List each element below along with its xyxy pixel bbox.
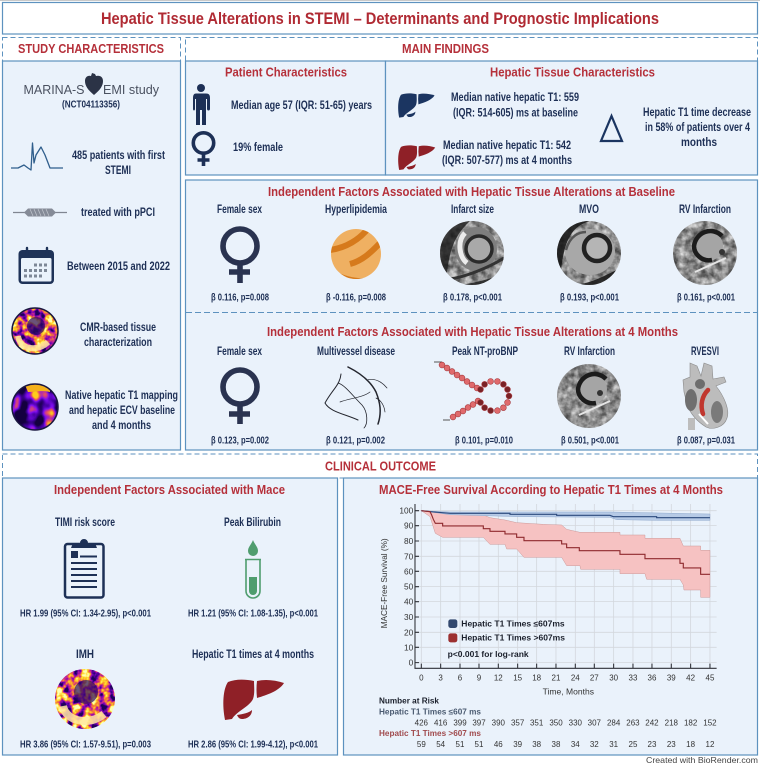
number at risk table: 399	[453, 718, 467, 727]
legend	[448, 619, 566, 659]
factor: MVO: β 0.193, p<0.001	[560, 292, 619, 304]
x axis labels	[419, 673, 715, 682]
number at risk table: 284	[607, 718, 621, 727]
number at risk table: 263	[626, 718, 640, 727]
x axis labels: 42	[686, 673, 696, 682]
number at risk table: 46	[494, 740, 503, 749]
factor: female sex 4 months: β 0.123, p=0.002	[211, 436, 269, 446]
heading: survival: MACE-Free Survival According to Hepatic T1 Times at 4 Months	[379, 483, 723, 497]
number at risk table: 330	[569, 718, 583, 727]
x axis labels: 39	[667, 673, 676, 682]
factor: infarct size	[440, 204, 504, 304]
factor: RVESVI: RVESVI	[691, 346, 719, 358]
y axis labels: 100	[399, 506, 414, 516]
study logo: MARINA-S	[24, 83, 84, 97]
icon: stent	[13, 208, 67, 216]
Kaplan-Meier chart	[379, 504, 717, 749]
axes	[415, 504, 717, 668]
factor: RV infarction 4 months: β 0.501, p<0.001	[561, 436, 619, 446]
title	[2, 2, 758, 34]
text: baseline T1: Median native hepatic T1: 559	[451, 92, 579, 104]
factor: RV infarction 4 months: RV Infarction	[564, 346, 615, 358]
factor: IMH: HR 3.86 (95% CI: 1.57-9.51), p=0.003	[20, 740, 151, 750]
factor: female sex baseline	[211, 204, 269, 304]
factor: hepatic T1 times: Hepatic T1 times at 4 months	[192, 649, 314, 661]
legend: Hepatic T1 Times ≤607ms	[461, 619, 565, 628]
y axis labels: 30	[404, 612, 414, 622]
number at risk table: 152	[703, 718, 717, 727]
y axis labels: 50	[404, 582, 414, 592]
heading: 4 month factors: Independent Factors Associated with Hepatic Tissue Alterations at 4 Months	[267, 325, 678, 339]
y axis labels: 40	[404, 597, 414, 607]
text: 4 month T1: (IQR: 507-577) ms at 4 months	[442, 155, 572, 167]
study logo: (NCT04113356)	[62, 100, 120, 110]
number at risk table: 390	[492, 718, 506, 727]
factor: hyperlipidemia	[325, 204, 387, 304]
legend: Hepatic T1 Times >607ms	[461, 633, 566, 642]
factor: RV infarction baseline	[673, 204, 737, 304]
x axis labels: 24	[571, 673, 580, 682]
icon: CMR map	[12, 308, 58, 354]
text: hepatic T1 mapping	[65, 390, 178, 432]
heading: MACE factors: Independent Factors Associated with Mace	[54, 483, 285, 497]
factor: multivessel disease: Multivessel disease	[317, 346, 395, 358]
panel: patient characteristics: Patient Characteristics	[225, 66, 347, 80]
number at risk table: 38	[532, 740, 542, 749]
red survival line	[421, 511, 710, 574]
factor: hyperlipidemia: Hyperlipidemia	[325, 204, 387, 216]
text: dates: Between 2015 and 2022	[67, 261, 170, 273]
y axis labels: 90	[404, 521, 414, 531]
y axis labels: 70	[404, 551, 414, 561]
text: hepatic T1 mapping: and 4 months	[92, 420, 151, 432]
text: patients	[72, 150, 165, 177]
factor: multivessel disease	[317, 346, 395, 446]
x axis labels: 12	[494, 673, 503, 682]
number at risk table: 351	[530, 718, 544, 727]
panel: clinical outcome header: CLINICAL OUTCOME	[325, 460, 436, 474]
top edge	[0, 0, 760, 1]
factor: TIMI risk score: TIMI risk score	[55, 517, 115, 529]
number at risk table	[379, 697, 717, 749]
number at risk table: 54	[436, 740, 446, 749]
x axis labels: 21	[552, 673, 561, 682]
text: hepatic T1 mapping: and hepatic ECV baseline	[69, 405, 175, 417]
factor: peak NT-proBNP	[434, 346, 518, 446]
number at risk table: Number at Risk	[379, 697, 440, 706]
factor: female sex baseline: β 0.116, p=0.008	[211, 292, 269, 304]
x axis labels: 6	[458, 673, 463, 682]
y axis labels: 80	[404, 536, 414, 546]
x axis labels: 30	[609, 673, 619, 682]
factor: multivessel disease: β 0.121, p=0.002	[326, 436, 385, 446]
x axis labels: 3	[438, 673, 443, 682]
text: 4 month T1: Median native hepatic T1: 542	[443, 140, 571, 152]
text: percent female: 19% female	[233, 142, 283, 154]
panel: independent factors MACE	[2, 478, 338, 755]
number at risk table: 350	[549, 718, 563, 727]
icon: calendar	[18, 248, 54, 284]
number at risk table: 18	[686, 740, 696, 749]
study logo: EMI study	[103, 83, 160, 97]
y axis title: MACE-Free Survival (%)	[380, 538, 389, 628]
text: T1 decrease: months	[681, 137, 717, 149]
factor: peak bilirubin: HR 1.21 (95% CI: 1.08-1.35), p<0.001	[188, 608, 318, 620]
panel: study characteristics header	[2, 38, 180, 61]
icon: blue liver	[398, 93, 435, 118]
blue survival line	[421, 511, 710, 518]
icon: person	[193, 84, 210, 125]
x axis labels: 15	[513, 673, 523, 682]
number at risk table: 307	[588, 718, 602, 727]
text: CMR characterization: CMR-based tissue	[80, 322, 156, 334]
factor: peak NT-proBNP: β 0.101, p=0.010	[455, 436, 513, 446]
factor: RV infarction baseline: β 0.161, p<0.001	[677, 292, 735, 304]
number at risk table: 51	[475, 740, 484, 749]
text: CMR characterization: characterization	[84, 337, 152, 349]
number at risk table: 51	[456, 740, 465, 749]
number at risk table: 25	[629, 740, 638, 749]
text: CMR characterization	[80, 322, 156, 349]
number at risk table: 218	[665, 718, 679, 727]
text: median age: Median age 57 (IQR: 51-65) years	[231, 100, 372, 112]
factor: female sex 4 months: Female sex	[217, 346, 262, 358]
x axis labels: 33	[629, 673, 638, 682]
number at risk table: 38	[552, 740, 561, 749]
text: hepatic T1 mapping: Native hepatic T1 mapping	[65, 390, 178, 402]
y axis labels: 20	[404, 627, 414, 637]
factor: TIMI risk score: HR 1.99 (95% CI: 1.34-2.95), p<0.001	[20, 608, 151, 620]
icon: ECG trace	[11, 143, 63, 170]
number at risk table: Hepatic T1 Times >607 ms	[379, 729, 482, 738]
blue confidence band	[421, 511, 710, 520]
number at risk table: 39	[513, 740, 523, 749]
factor: peak bilirubin	[188, 517, 318, 620]
factor: peak bilirubin: Peak Bilirubin	[224, 517, 281, 529]
x axis labels: 36	[648, 673, 657, 682]
factor: RV infarction baseline: RV Infarction	[679, 204, 731, 216]
icon: female symbol	[193, 133, 214, 166]
number at risk table: 59	[417, 740, 426, 749]
panel: independent factors	[186, 180, 758, 450]
factor: hepatic T1 times: HR 2.86 (95% CI: 1.99-4.12), p<0.001	[188, 740, 318, 750]
text: 4 month T1	[442, 140, 572, 167]
text: baseline T1	[451, 92, 579, 120]
panel: study characteristics	[2, 61, 180, 450]
number at risk table: 426	[415, 718, 429, 727]
heading: baseline factors: Independent Factors Associated with Hepatic Tissue Alterations at Baseline	[268, 185, 675, 199]
text: treated with pPCI: treated with pPCI	[81, 207, 155, 219]
number at risk table: 23	[667, 740, 676, 749]
factor: female sex baseline: Female sex	[217, 204, 262, 216]
factor: IMH: IMH	[76, 649, 94, 661]
panel: main findings header: MAIN FINDINGS	[402, 42, 489, 56]
x axis labels: 18	[532, 673, 542, 682]
panel: main findings header	[186, 38, 758, 61]
number at risk table: 34	[571, 740, 580, 749]
factor: peak NT-proBNP: Peak NT-proBNP	[452, 346, 518, 358]
x axis labels: 27	[590, 673, 599, 682]
study logo	[24, 73, 160, 110]
y axis labels: 10	[404, 642, 414, 652]
panel: study characteristics header: STUDY CHARACTERISTICS	[18, 42, 164, 56]
number at risk table: 32	[590, 740, 599, 749]
number at risk table: 12	[706, 740, 715, 749]
factor: infarct size: β 0.178, p<0.001	[443, 292, 502, 304]
text: baseline T1: (IQR: 514-605) ms at baseline	[453, 108, 578, 120]
number at risk table: 416	[434, 718, 448, 727]
number at risk table: 357	[511, 718, 525, 727]
number at risk table: 182	[684, 718, 698, 727]
factor: infarct size: Infarct size	[451, 204, 494, 216]
x axis labels: 9	[477, 673, 482, 682]
x axis labels: 0	[419, 673, 424, 682]
factor: RVESVI	[677, 346, 735, 446]
factor: MVO	[557, 204, 621, 304]
factor: hyperlipidemia: β -0.116, p=0.008	[326, 292, 386, 304]
number at risk table: 23	[648, 740, 657, 749]
red confidence band	[421, 511, 710, 597]
factor: TIMI risk score	[20, 517, 151, 620]
icon: delta	[601, 116, 622, 141]
factor: RVESVI: β 0.087, p=0.031	[677, 436, 735, 446]
number at risk table: 397	[472, 718, 486, 727]
y axis labels	[399, 506, 414, 668]
title: Hepatic Tissue Alterations in STEMI – Determinants and Prognostic Implications	[101, 10, 659, 28]
number at risk table: 242	[645, 718, 659, 727]
factor: MVO: MVO	[579, 204, 599, 216]
text: T1 decrease	[643, 107, 751, 149]
panel: survival chart	[344, 478, 758, 755]
legend: p<0.001 for log-rank	[448, 650, 529, 659]
text: patients: STEMI	[105, 165, 131, 177]
panel: clinical outcome header	[2, 454, 758, 478]
y axis labels: 0	[409, 658, 414, 668]
panel: hepatic tissue characteristics	[386, 61, 758, 175]
x axis labels: 45	[706, 673, 715, 682]
x axis title: Time, Months	[543, 688, 594, 697]
icon: liver map	[12, 384, 58, 430]
factor: IMH	[20, 649, 151, 750]
icon: red liver	[398, 145, 435, 170]
number at risk table: Hepatic T1 Times ≤607 ms	[379, 707, 482, 716]
factor: RV infarction 4 months	[557, 346, 621, 446]
text: patients: 485 patients with first	[72, 150, 165, 162]
number at risk table: 31	[609, 740, 619, 749]
y axis labels: 60	[404, 566, 414, 576]
factor: hepatic T1 times	[188, 649, 318, 750]
panel: hepatic tissue characteristics: Hepatic Tissue Characteristics	[490, 66, 655, 80]
factor: female sex 4 months	[211, 346, 269, 446]
panel: patient characteristics	[186, 61, 386, 175]
